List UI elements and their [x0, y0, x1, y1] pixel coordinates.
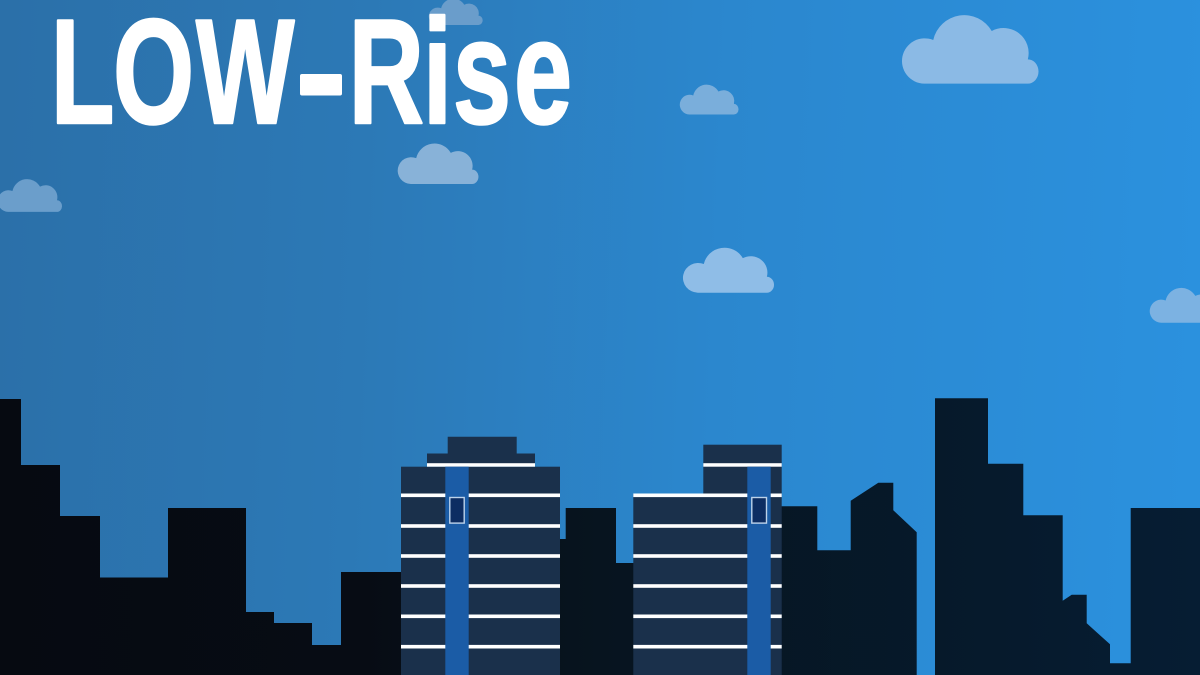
body: [633, 494, 782, 675]
floor lines: [401, 463, 560, 648]
tower top: [703, 445, 782, 495]
cloud: below title: [398, 144, 478, 184]
elevator car: [752, 498, 766, 523]
elevator shaft: [747, 467, 771, 675]
elevator car: [450, 498, 464, 523]
cloud: middle: [683, 248, 774, 293]
cloud: right edge: [1150, 288, 1200, 323]
cloud: top centre small: [680, 85, 739, 114]
building: left low-rise: [401, 437, 560, 675]
cloud: left edge: [0, 179, 62, 212]
skyline silhouette: far right: [935, 398, 1200, 675]
body: [401, 467, 560, 675]
cloud: behind title: [429, 0, 483, 25]
skyline silhouette: left: [0, 399, 402, 675]
building: right low-rise: [633, 445, 782, 675]
skyline silhouette: centre: [560, 508, 634, 675]
elevator shaft: [445, 467, 469, 675]
skyline silhouette: right of buildings: [781, 483, 917, 675]
cloud: top right large: [902, 15, 1039, 84]
roof: [427, 437, 535, 465]
floor lines: [633, 463, 782, 648]
